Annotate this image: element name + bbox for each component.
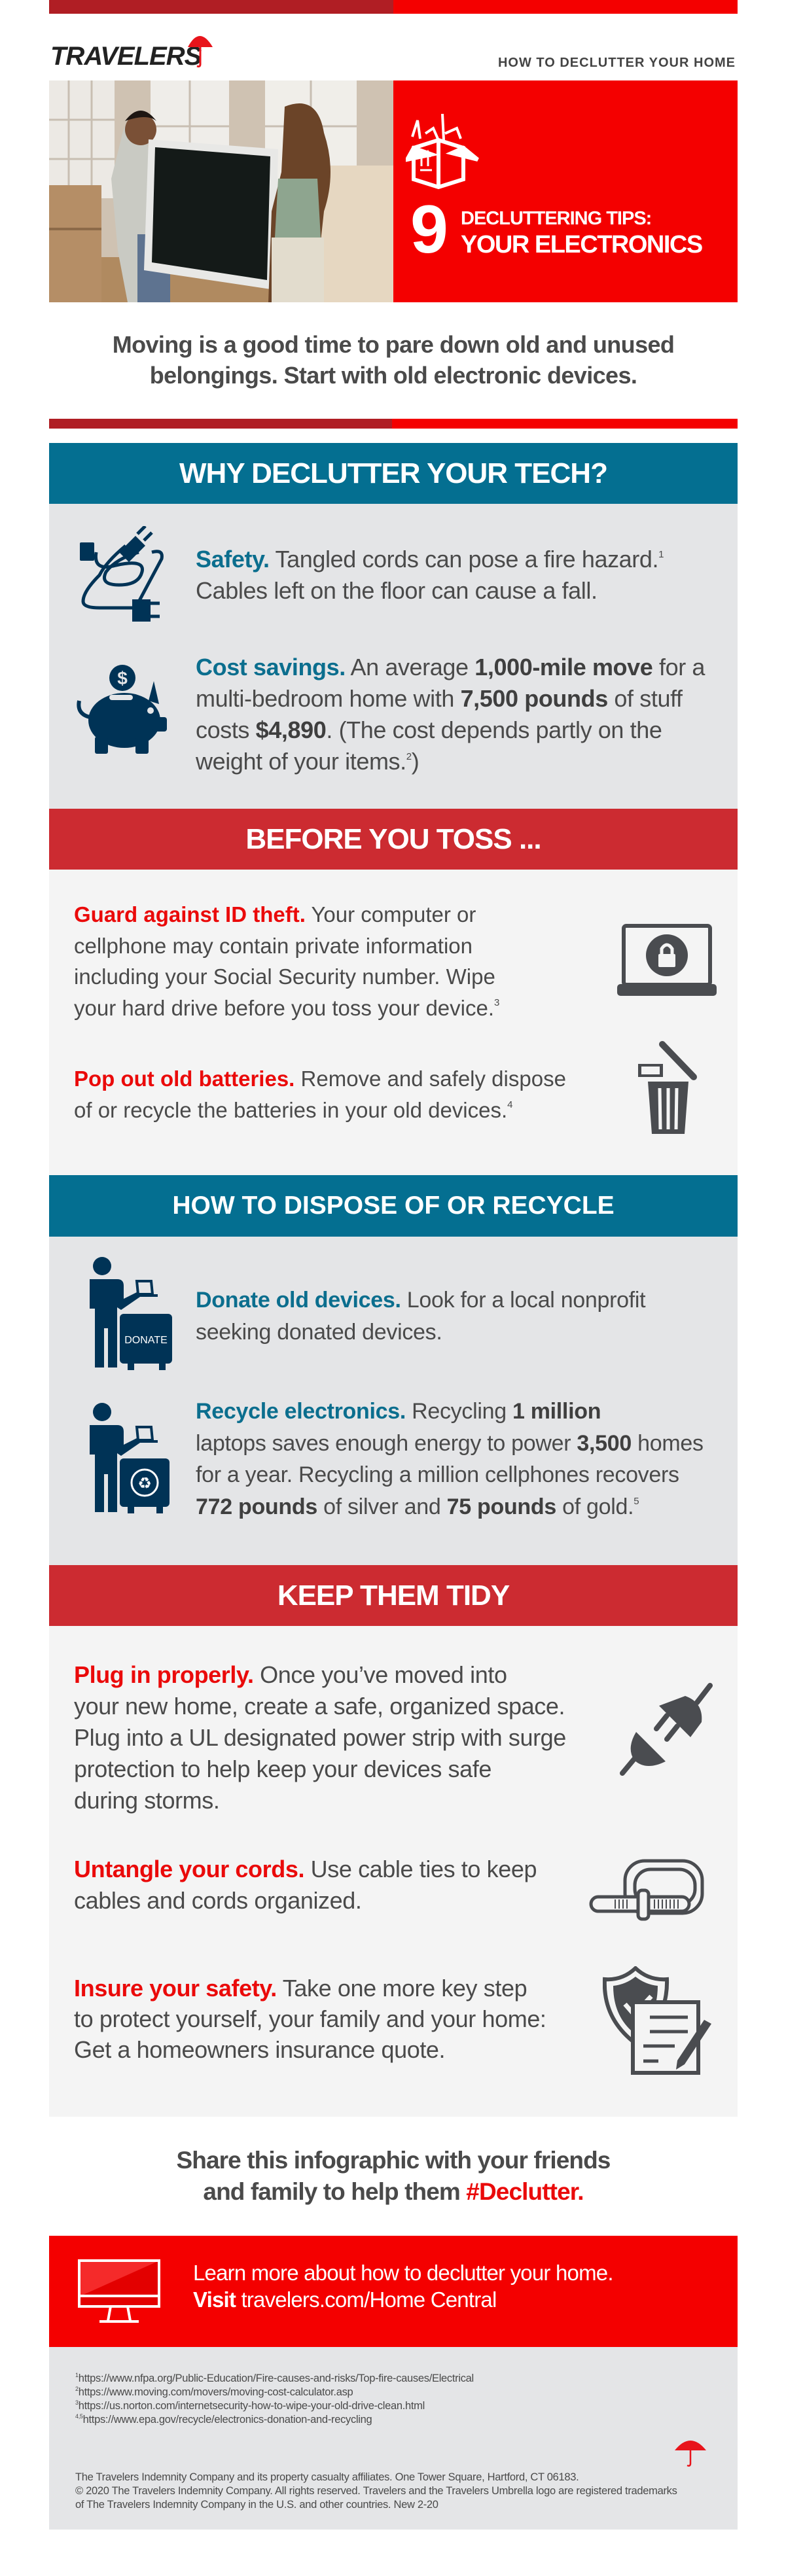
text: insure xyxy=(74,1975,546,2063)
heading: why declutter: WHY DECLUTTER YOUR TECH? xyxy=(179,457,607,489)
text: learn more: Learn more about how to declutter your home. xyxy=(193,2261,613,2285)
big 9: 9 xyxy=(410,192,448,268)
icon: cable tie xyxy=(589,1860,704,1921)
text: ID theft: including your Social Security number. Wipe xyxy=(74,964,495,989)
icon: person recycling: ♻ xyxy=(137,1474,152,1492)
text: batteries xyxy=(74,1067,566,1122)
panel: why declutter xyxy=(49,504,738,809)
text: donate: Donate old devices. Look for a local nonprofit xyxy=(196,1288,645,1313)
share text: and family to help them #Declutter. xyxy=(203,2178,584,2205)
intro text xyxy=(113,331,674,389)
text: cost savings: Cost savings. An average 1,000-mile move for a xyxy=(196,654,705,680)
text: ID theft xyxy=(74,902,499,1020)
footnotes: 4,5https://www.epa.gov/recycle/electronics-donation-and-recycling xyxy=(75,2413,372,2426)
icon: person recycling xyxy=(90,1403,170,1513)
text: insure: Insure your safety. Take one more key step xyxy=(74,1975,527,2002)
text: plug in: Plug in properly. Once you’ve moved into xyxy=(74,1661,507,1688)
icon: unplugged plug xyxy=(620,1683,713,1776)
intro text: Moving is a good time to pare down old and unused xyxy=(113,331,674,358)
heading: keep them tidy: KEEP THEM TIDY xyxy=(277,1579,509,1612)
subtitle: HOW TO DECLUTTER YOUR HOME xyxy=(498,56,736,70)
icon: box of electronics xyxy=(406,114,479,190)
text: cost savings xyxy=(196,654,706,775)
heading: before you toss: BEFORE YOU TOSS ... xyxy=(245,823,541,855)
icon: battery trash can xyxy=(638,1041,697,1134)
heading text: DECLUTTERING TIPS: xyxy=(461,208,651,229)
legal text xyxy=(75,2471,677,2511)
text: recycle xyxy=(196,1399,704,1519)
text: insure: Get a homeowners insurance quote. xyxy=(74,2036,445,2063)
share text xyxy=(177,2147,610,2205)
icon: person donating: DONATE xyxy=(124,1335,168,1346)
callout: learn more xyxy=(49,2236,738,2347)
heading text xyxy=(461,208,702,258)
divider bar xyxy=(49,419,738,429)
heading: keep them tidy xyxy=(49,1565,738,1626)
footer panel xyxy=(49,2347,738,2530)
heading: why declutter xyxy=(49,443,738,504)
text: ID theft: cellphone may contain private information xyxy=(74,933,473,958)
top color bar xyxy=(49,0,738,14)
text: plug in: protection to help keep your devices safe xyxy=(74,1756,491,1782)
panel: dispose or recycle xyxy=(49,1237,738,1565)
text: plug in: Plug into a UL designated power strip with surge xyxy=(74,1724,566,1751)
title panel xyxy=(393,80,738,302)
text: learn more xyxy=(193,2261,613,2312)
heading: before you toss xyxy=(49,809,738,870)
intro text: belongings. Start with old electronic devices. xyxy=(150,362,637,389)
text: insure: to protect yourself, your family and your home: xyxy=(74,2005,546,2032)
text: plug in: during storms. xyxy=(74,1787,219,1814)
text: recycle: 772 pounds of silver and 75 pounds of gold.5 xyxy=(196,1494,639,1519)
text: cost savings: costs $4,890. (The cost depends partly on the xyxy=(196,716,662,743)
text: plug in: your new home, create a safe, organized space. xyxy=(74,1693,565,1720)
footnotes: 2https://www.moving.com/movers/moving-cost-calculator.asp xyxy=(75,2386,353,2398)
text: batteries: of or recycle the batteries in your old devices.4 xyxy=(74,1098,513,1121)
photo: couple carrying TV xyxy=(49,80,393,302)
text: recycle: laptops saves enough energy to power 3,500 homes xyxy=(196,1430,704,1455)
heading text: YOUR ELECTRONICS xyxy=(461,231,702,258)
text: batteries: Pop out old batteries. Remove and safely dispose xyxy=(74,1067,566,1091)
text: untangle xyxy=(74,1856,537,1914)
text: ID theft: your hard drive before you toss your device.3 xyxy=(74,996,499,1019)
legal text: © 2020 The Travelers Indemnity Company. All rights reserved. Travelers and the Travelers Umbrella logo are registered trademarks xyxy=(75,2485,677,2497)
text: recycle: Recycle electronics. Recycling 1 million xyxy=(196,1399,601,1424)
text: untangle: cables and cords organized. xyxy=(74,1887,361,1914)
icon: person donating xyxy=(90,1257,172,1370)
text: cost savings: weight of your items.2) xyxy=(196,748,419,775)
footnotes xyxy=(75,2372,474,2426)
icon: umbrella xyxy=(675,2441,706,2467)
footnotes: 3https://us.norton.com/internetsecurity-how-to-wipe-your-old-drive-clean.html xyxy=(75,2399,425,2412)
heading: dispose or recycle xyxy=(49,1175,738,1237)
text: plug in xyxy=(74,1661,566,1814)
text: untangle: Untangle your cords. Use cable ties to keep xyxy=(74,1856,537,1882)
share text: Share this infographic with your friends xyxy=(177,2147,610,2174)
text: recycle: for a year. Recycling a million cellphones recovers xyxy=(196,1462,679,1487)
icon: monitor xyxy=(78,2259,160,2323)
icon: piggy bank: $ xyxy=(117,668,128,688)
panel: keep them tidy xyxy=(49,1626,738,2117)
logo: Travelers: TRAVELERS xyxy=(50,42,201,71)
text: donate xyxy=(196,1288,645,1345)
icon: piggy bank xyxy=(77,665,167,754)
legal text: The Travelers Indemnity Company and its property casualty affiliates. One Tower Square, Hartford, CT 06183. xyxy=(75,2471,579,2483)
text: safety: Safety. Tangled cords can pose a fire hazard.1 xyxy=(196,546,664,573)
icon: shield and document xyxy=(603,1966,711,2075)
footnotes: 1https://www.nfpa.org/Public-Education/Fire-causes-and-risks/Top-fire-causes/Electrical xyxy=(75,2372,474,2384)
panel: before you toss xyxy=(49,870,738,1175)
text: safety: Cables left on the floor can cause a fall. xyxy=(196,577,598,604)
icon: tangled cord xyxy=(80,526,164,622)
text: cost savings: multi-bedroom home with 7,500 pounds of stuff xyxy=(196,685,683,712)
legal text: of The Travelers Indemnity Company in the U.S. and other countries. New 2-20 xyxy=(75,2499,438,2511)
text: learn more: Visit travelers.com/Home Central xyxy=(193,2287,496,2312)
text: safety xyxy=(196,546,664,604)
icon: locked laptop xyxy=(617,924,717,996)
text: donate: seeking donated devices. xyxy=(196,1320,442,1345)
heading: dispose or recycle: HOW TO DISPOSE OF OR RECYCLE xyxy=(172,1191,615,1220)
text: ID theft: Guard against ID theft. Your computer or xyxy=(74,902,476,926)
